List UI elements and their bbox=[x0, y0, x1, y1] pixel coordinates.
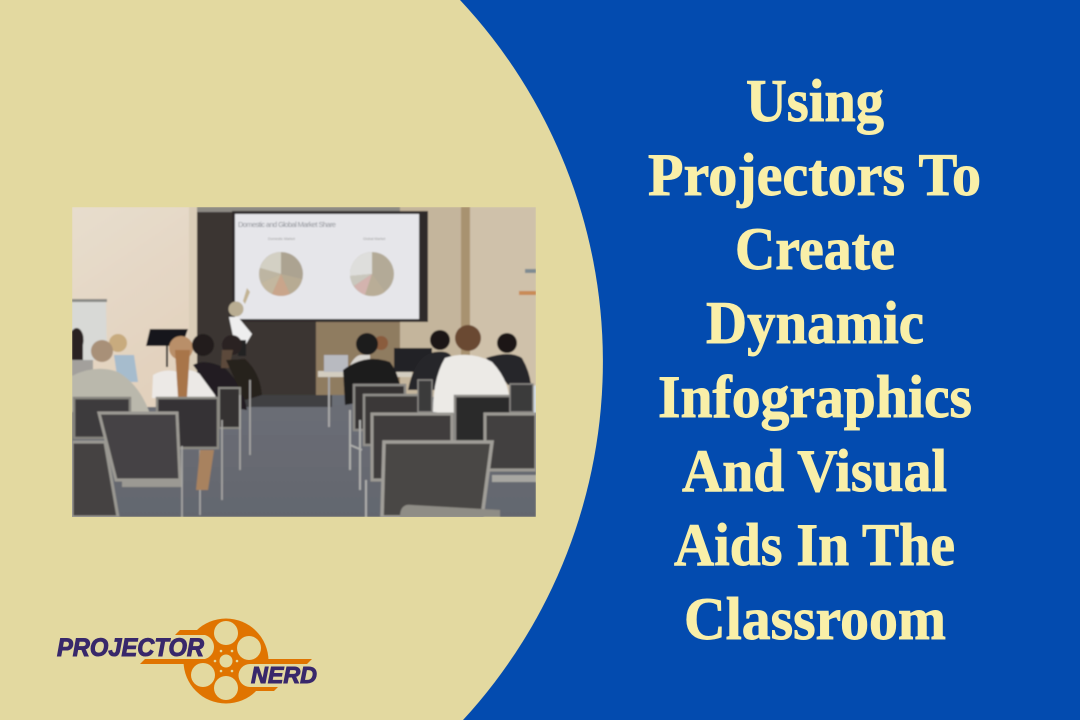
projector screen: Domestic Market bbox=[268, 237, 295, 241]
title: And Visual bbox=[682, 438, 947, 504]
title: Dynamic bbox=[706, 290, 924, 356]
logo: Projector Nerd bbox=[57, 618, 320, 704]
audience left bbox=[72, 328, 262, 414]
presenter bbox=[228, 288, 252, 356]
logo text: NERD: NERD bbox=[251, 662, 317, 688]
title: Classroom bbox=[684, 586, 946, 652]
title: Projectors To bbox=[648, 142, 981, 208]
title: Using bbox=[746, 68, 884, 134]
audience right bbox=[343, 325, 536, 414]
title bbox=[648, 68, 981, 652]
projector screen: Global Market bbox=[363, 237, 385, 241]
pie chart: global bbox=[350, 252, 394, 296]
logo: film reel and bands bbox=[140, 618, 320, 704]
title: Infographics bbox=[658, 364, 972, 430]
title: Aids In The bbox=[674, 512, 955, 578]
projector screen: Domestic and Global Market Share bbox=[238, 220, 336, 229]
logo text: PROJECTOR: PROJECTOR bbox=[57, 634, 204, 662]
chairs left bbox=[72, 380, 250, 517]
title: Create bbox=[735, 216, 895, 282]
photo: classroom presentation with projector bbox=[72, 207, 536, 517]
background: cream arc panel bbox=[0, 0, 603, 720]
projector screen bbox=[232, 211, 428, 322]
laptop and table bbox=[318, 348, 432, 427]
pie chart: domestic bbox=[259, 252, 303, 296]
music stand bbox=[146, 329, 188, 346]
flipchart bbox=[72, 299, 107, 360]
chairs right bbox=[350, 380, 536, 517]
